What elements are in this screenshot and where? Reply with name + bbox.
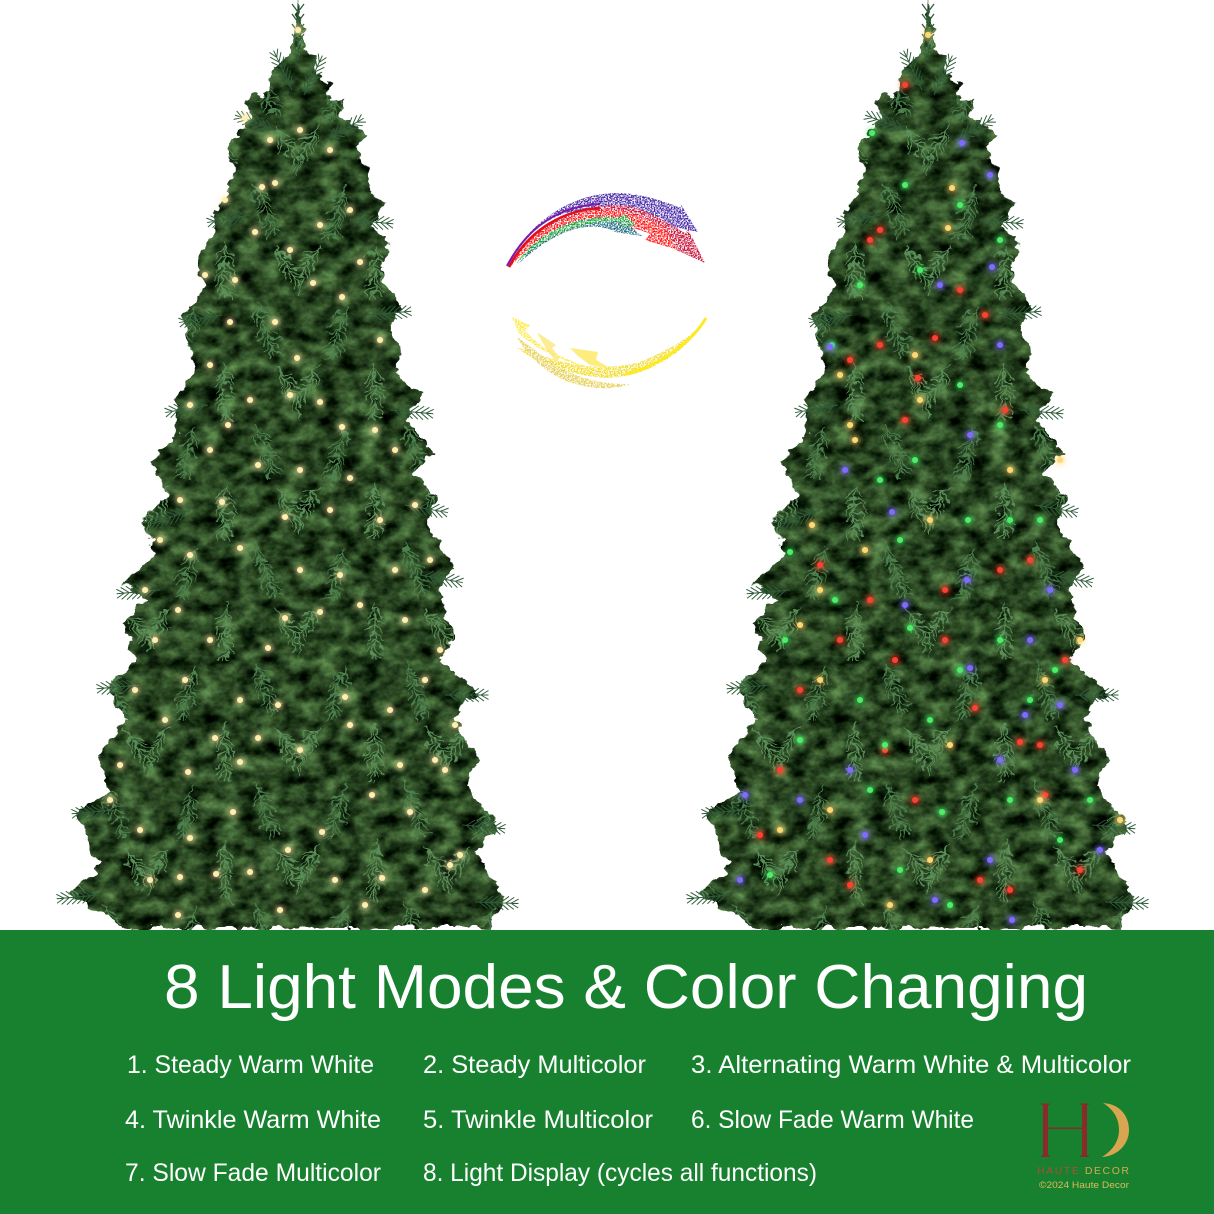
- logo: Haute Decor: [1037, 1103, 1129, 1191]
- logo wordmark: HAUTE DECOR: [1037, 1165, 1129, 1177]
- mode 2: 2. Steady Multicolor: [423, 1051, 646, 1079]
- color changing arrows icon: [507, 193, 707, 388]
- rainbow arc arrows: [507, 193, 705, 268]
- tree foliage left: [56, 0, 519, 928]
- mode 3: 3. Alternating Warm White & Multicolor: [691, 1051, 1131, 1079]
- left tree: warm white lights: [56, 0, 519, 928]
- right tree: multicolor lights: [686, 0, 1149, 928]
- solid rainbow core: [509, 208, 600, 267]
- red and orange lights: [760, 85, 1080, 890]
- list of light modes: [125, 1051, 1131, 1187]
- logo crescent D: [1102, 1103, 1129, 1157]
- mode 4: 4. Twinkle Warm White: [125, 1106, 381, 1134]
- green lights: [770, 133, 1090, 905]
- warm white lights left: [110, 30, 460, 915]
- mode 5: 5. Twinkle Multicolor: [423, 1106, 653, 1134]
- blue and violet lights: [740, 143, 1100, 920]
- mode 8: 8. Light Display (cycles all functions): [423, 1159, 817, 1187]
- title: 8 Light Modes & Color Changing: [164, 953, 1088, 1022]
- green banner: [0, 930, 1214, 1214]
- yellow arrowheads: [537, 332, 560, 362]
- logo monogram H: [1041, 1104, 1089, 1157]
- mode 6: 6. Slow Fade Warm White: [691, 1106, 974, 1134]
- yellow arc arrows: [512, 317, 707, 388]
- tree foliage right: [686, 0, 1149, 928]
- warm lights: [780, 35, 1120, 905]
- mode 1: 1. Steady Warm White: [127, 1051, 374, 1079]
- mode 7: 7. Slow Fade Multicolor: [125, 1159, 381, 1187]
- copyright: ©2024 Haute Decor: [1039, 1180, 1129, 1191]
